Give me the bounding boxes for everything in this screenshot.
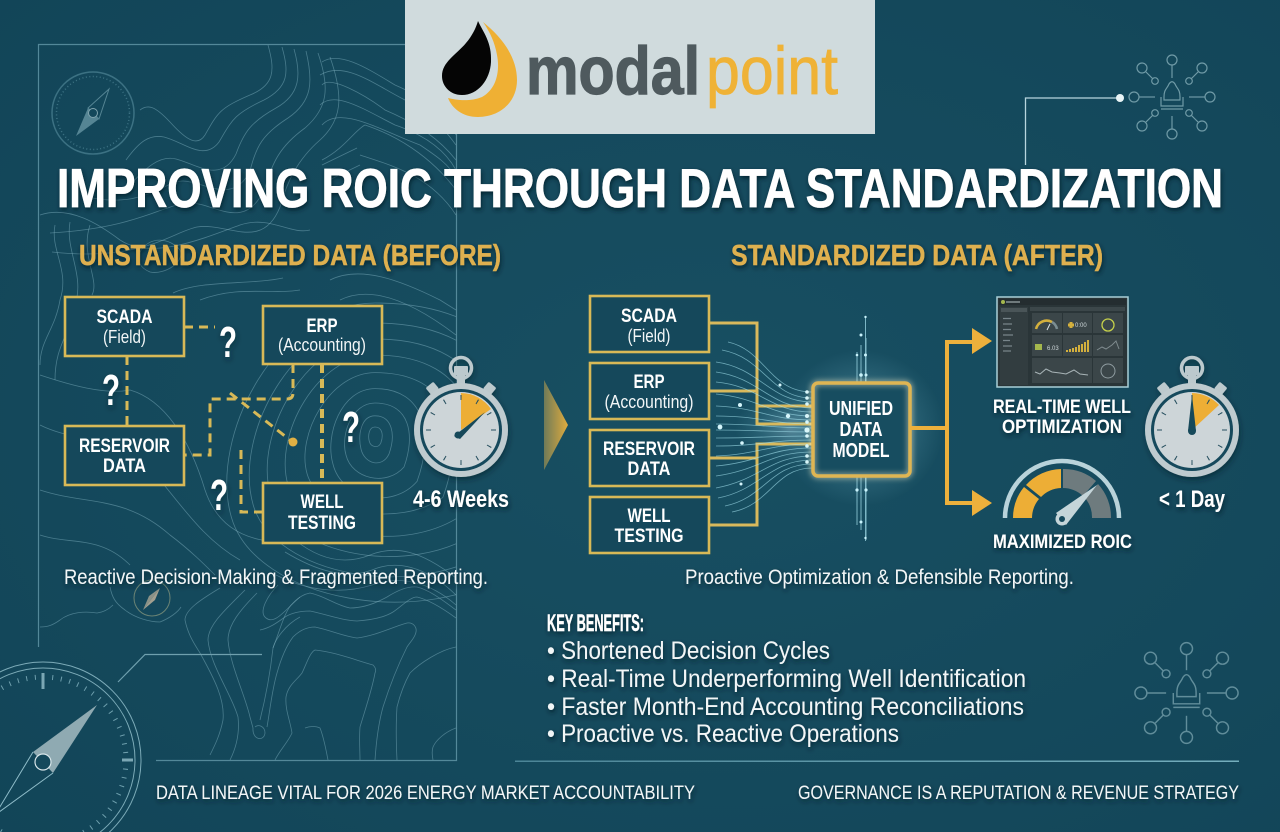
question marks: ? [342, 403, 360, 452]
text block: key benefits: • Shortened Decision Cycles [547, 637, 830, 665]
box: ERP: (Accounting) [278, 335, 366, 355]
label: 4-6 weeks: 4-6 Weeks [413, 486, 509, 513]
box: ERP [263, 306, 382, 364]
text block: key benefits [547, 610, 1026, 748]
icon: small compass top left [52, 72, 134, 154]
text block: key benefits: KEY BENEFITS: [547, 610, 644, 637]
box: well testing [263, 483, 382, 543]
box: well testing: TESTING [614, 526, 684, 547]
label: under 1 day: < 1 Day [1159, 486, 1226, 513]
box: reservoir data: RESERVOIR [603, 439, 695, 460]
logo: wordmark: modal [526, 33, 700, 109]
icon: large compass bottom left [0, 654, 262, 832]
label: real-time well optimization: REAL-TIME WELL [993, 397, 1131, 418]
box: unified data model: UNIFIED [829, 398, 893, 420]
arrows: outputs [910, 328, 992, 516]
box: unified data model: DATA [840, 419, 882, 441]
text block: key benefits: • Faster Month-End Accounting Reconciliations [547, 693, 1024, 721]
icon: network top right [1129, 55, 1215, 139]
question marks: ? [102, 366, 120, 415]
box: unified data model: MODEL [832, 440, 890, 462]
box: reservoir data: DATA [628, 459, 671, 480]
text block: key benefits: • Real-Time Underperforming Well Identification [547, 665, 1026, 693]
dashboard thumbnail: 6.03 [1047, 346, 1059, 352]
dashed broken links [127, 327, 322, 512]
heading: after: STANDARDIZED DATA (AFTER) [731, 240, 1103, 272]
box: well testing [590, 497, 709, 553]
icon: network lower right [1135, 643, 1238, 743]
caption: before: Reactive Decision-Making & Fragmented Reporting. [64, 566, 488, 589]
panel: unstandardized data diagram [65, 297, 382, 543]
solid connectors [709, 323, 812, 525]
arrow: before to after [544, 380, 568, 470]
connector to top network icon [1026, 94, 1124, 165]
box: well testing: TESTING [288, 513, 356, 534]
question marks: ? [219, 318, 237, 367]
box: reservoir data: DATA [103, 456, 146, 477]
text block: key benefits: • Proactive vs. Reactive Operations [547, 720, 899, 748]
caption: after: Proactive Optimization & Defensible Reporting. [685, 566, 1074, 589]
box: well testing: WELL [628, 506, 671, 527]
icon: tiny compass [134, 580, 170, 616]
label: real-time well optimization [993, 397, 1131, 438]
box: reservoir data: RESERVOIR [79, 436, 170, 457]
panel: standardized data diagram [590, 296, 992, 553]
box: ERP: ERP [306, 316, 338, 337]
box: well testing: WELL [300, 492, 344, 513]
map frame [38, 44, 456, 760]
box: SCADA: (Field) [628, 326, 670, 346]
box: SCADA: SCADA [96, 307, 153, 328]
dashboard thumbnail: 0:00 [1075, 323, 1087, 329]
box: SCADA: (Field) [103, 327, 146, 347]
data stream glow [735, 350, 943, 506]
box: ERP: ERP [634, 372, 665, 393]
topographic map backdrop [40, 45, 540, 760]
icon: stopwatch 4-6 weeks [414, 358, 508, 477]
dashboard thumbnail [997, 297, 1128, 387]
icon: ROIC gauge [1005, 461, 1119, 526]
question marks: ? [210, 471, 228, 520]
flowing data lines [716, 342, 812, 512]
logo panel [405, 0, 875, 134]
box: SCADA [65, 297, 184, 356]
footer: data lineage: DATA LINEAGE VITAL FOR 2026 ENERGY MARKET ACCOUNTABILITY [156, 782, 695, 804]
box: unified data model [813, 383, 910, 476]
box: reservoir data [65, 426, 184, 485]
icon: stopwatch under 1 day [1145, 358, 1239, 477]
label: real-time well optimization: OPTIMIZATION [1002, 417, 1122, 438]
logo: wordmark [526, 33, 838, 109]
box: ERP [590, 363, 709, 419]
box: SCADA: SCADA [621, 306, 677, 327]
logo: drop mark [442, 21, 517, 117]
vertical light beams [855, 316, 868, 541]
logo: wordmark: point [706, 33, 838, 109]
heading: before: UNSTANDARDIZED DATA (BEFORE) [79, 240, 501, 272]
stream sparkles [718, 384, 810, 486]
question marks [102, 318, 360, 520]
box: reservoir data [590, 430, 709, 486]
box: SCADA [590, 296, 709, 352]
label: maximized ROIC: MAXIMIZED ROIC [993, 532, 1132, 553]
box: ERP: (Accounting) [604, 392, 694, 412]
